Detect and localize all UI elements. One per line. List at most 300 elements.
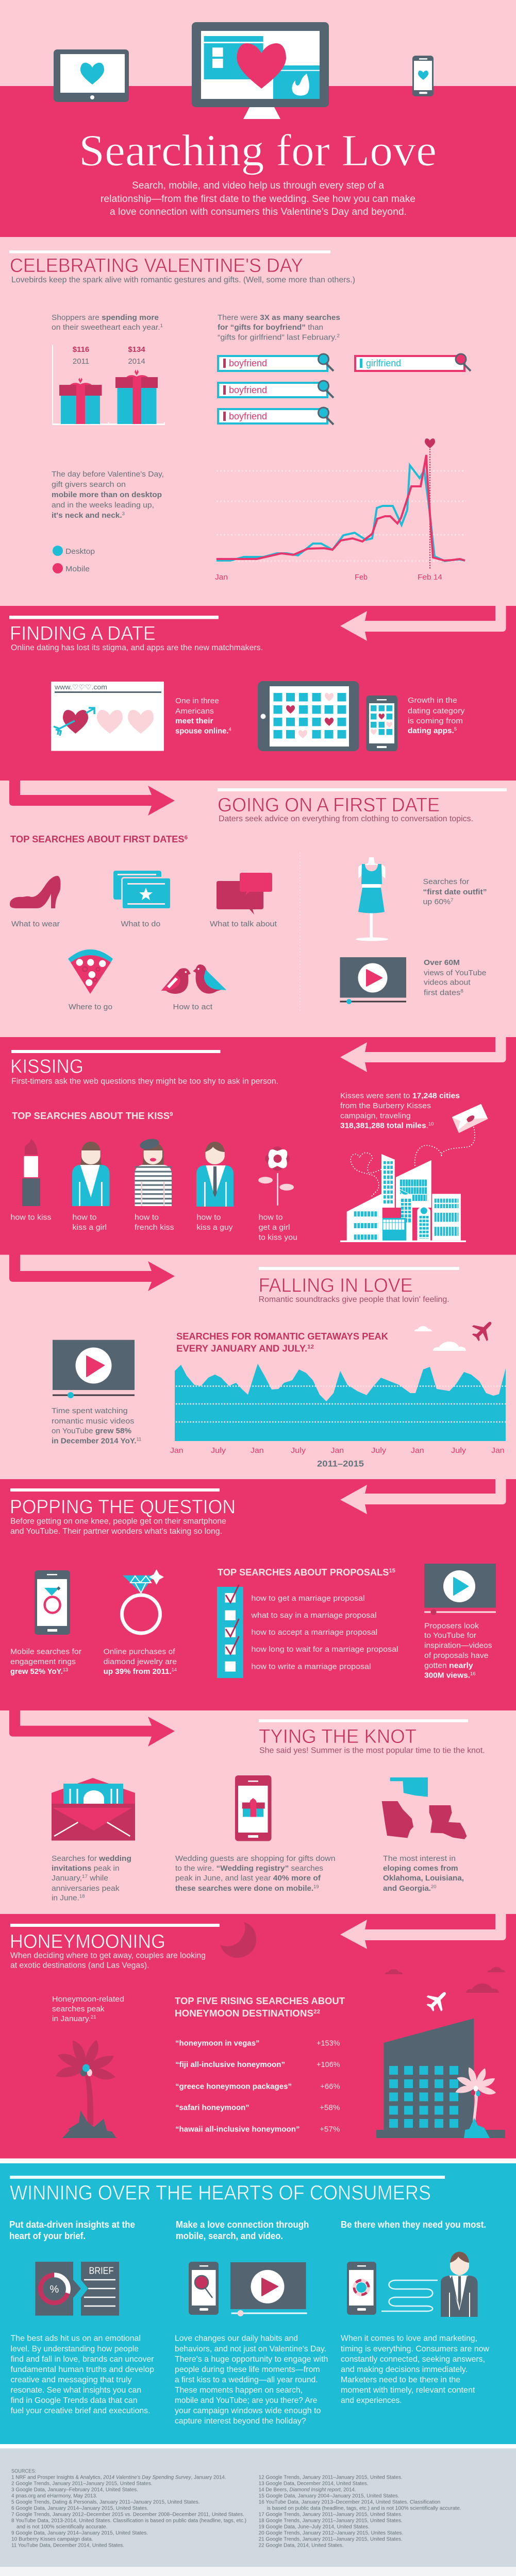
mobile vs desktop text: it's neck and neck. <box>52 511 122 520</box>
heading: TYING THE KNOT <box>259 1726 417 1748</box>
sources left column: 3 Google Data, January–February 2014, United States. <box>11 2486 138 2493</box>
label: What to talk about <box>210 920 277 928</box>
hero panel <box>0 22 516 237</box>
icon: phone <box>412 56 434 96</box>
spending text: Shoppers are spending more <box>52 313 159 322</box>
searches text <box>218 313 340 342</box>
text columns: creative and messaging that truly <box>10 2376 132 2384</box>
panel: sources: SOURCES: <box>11 2468 36 2474</box>
title: Searching for Love <box>79 125 437 175</box>
search boxes: girlfriend <box>366 358 401 368</box>
sources right column: 13 Google Data, December 2014, United States. <box>259 2480 368 2486</box>
column heads: Put data-driven insights at the <box>9 2219 135 2230</box>
legend <box>53 546 95 573</box>
panel: finding a date <box>0 606 516 781</box>
text columns: fuel your creative brief and executions. <box>10 2406 151 2415</box>
text: proposers: 300M views. <box>424 1671 470 1680</box>
text: proposers: to YouTube for <box>424 1631 476 1640</box>
text columns <box>10 2334 489 2426</box>
heading: CELEBRATING VALENTINE'S DAY <box>10 255 303 277</box>
icon: wedding invitation <box>52 1778 135 1840</box>
sources left column <box>11 2474 246 2548</box>
arrow <box>340 1914 506 1949</box>
text columns: These moments happen on search, <box>175 2386 303 2395</box>
icon: phone and marketer <box>347 2252 478 2317</box>
icon: phone and video <box>189 2262 307 2316</box>
panel: honeymooning <box>0 1914 516 2159</box>
icon: plane <box>468 1315 498 1345</box>
icon: flower <box>258 1146 294 1206</box>
search boxes: boyfriend <box>229 411 267 421</box>
arrow <box>9 781 175 816</box>
intro text <box>101 180 415 217</box>
icon: video player <box>424 1564 496 1615</box>
text: wedding registry: peak in June, and last year 40% more of <box>175 1874 321 1883</box>
sources right column: 21 Google Trends, January 2011–January 2015, United States. <box>259 2536 403 2542</box>
checklist: how to get a marriage proposal <box>252 1594 365 1603</box>
ranking list: +153% <box>317 2039 340 2047</box>
search boxes: boyfriend <box>229 358 267 368</box>
ranking list: +106% <box>317 2060 340 2069</box>
area chart: July <box>211 1446 226 1455</box>
panel: celebrating valentine's day <box>9 250 471 582</box>
sources right column: 16 YouTube Data, January 2013–December 2014, United States. Classification <box>259 2499 440 2505</box>
icon: diamond ring <box>122 1569 164 1633</box>
sources right column: 22 Google Data, 2014, United States. <box>259 2542 343 2548</box>
search boxes: boyfriend <box>229 385 267 395</box>
text columns: Marketers need to be there in the <box>341 2376 460 2384</box>
chart heading <box>176 1331 388 1354</box>
searches text: 2 <box>337 333 340 338</box>
text: wedding registry: to the wire. “Wedding registry” searches <box>175 1864 323 1873</box>
sources left column: 5 Google Trends, Dating & Personals, January 2011–January 2015, United States. <box>11 2499 200 2505</box>
arrow <box>9 1255 175 1291</box>
footer <box>0 2567 516 2576</box>
text: time spent: in December 2014 YoY. <box>52 1437 137 1446</box>
panel: tying the knot <box>9 1710 485 1903</box>
sources right column: 17 Google Trends, January 2011–January 2015, United States. <box>259 2511 403 2517</box>
sources right column: 20 Google Trends, January 2012–January 2015, Unites States. <box>259 2530 403 2536</box>
text: first date outfit: 7 <box>451 897 454 903</box>
sources right column: 14 De Beers, Diamond Insight report, 2014. <box>259 2486 356 2493</box>
ranking list: +58% <box>320 2104 340 2112</box>
text: diamond jewelry: up 39% from 2011. <box>104 1667 172 1676</box>
text columns: your campaign windows wide enough to <box>175 2406 321 2415</box>
icon: shoe <box>10 876 60 908</box>
mobile vs desktop text: The day before Valentine's Day, <box>52 470 164 479</box>
text columns: a first kiss to a wedding—all year round. <box>175 2376 318 2384</box>
text columns: capture interest beyond the holiday? <box>175 2417 306 2426</box>
text: one in three: 4 <box>229 726 231 732</box>
sources right column: 18 Google Trends, January 2011–January 2015, United States. <box>259 2517 403 2523</box>
column heads: mobile, search, and video. <box>176 2231 283 2241</box>
panel: popping the question <box>0 1479 516 1710</box>
area chart: Jan <box>170 1446 184 1455</box>
text: proposers <box>424 1622 492 1680</box>
line chart: Jan <box>215 573 228 582</box>
icon: brief <box>35 2262 119 2316</box>
text: one in three: Americans <box>175 707 214 716</box>
text: mobile searches: Mobile searches for <box>10 1648 81 1656</box>
text: mobile searches: 13 <box>63 1667 68 1672</box>
icon: state maps <box>382 1777 467 1839</box>
icon: envelope with kiss <box>452 1104 488 1133</box>
sources left column: 9 Google Data, January 2014–January 2015, United States. <box>11 2530 148 2536</box>
text: one in three: spouse online. <box>175 726 229 736</box>
labels: kiss searches <box>10 1213 297 1242</box>
top searches heading: 15 <box>389 1568 395 1574</box>
text: eloping: Oklahoma, Louisiana, <box>383 1874 464 1883</box>
browser illustration: www.♡♡♡.com <box>54 683 107 691</box>
subheading: Romantic soundtracks give people that lovin' feeling. <box>259 1295 450 1304</box>
ranking list: “honeymoon in vegas” <box>175 2039 260 2047</box>
text: mobile searches <box>10 1648 81 1676</box>
line chart: Feb <box>355 573 368 582</box>
text columns: find and fall in love, brands can uncover <box>10 2355 154 2364</box>
icon: moon <box>220 1922 256 1958</box>
icon: city skyline <box>340 1154 466 1242</box>
sources right column: 12 Google Trends, January 2011–January 2015, United States. <box>259 2474 403 2480</box>
label: What to wear <box>11 920 60 928</box>
heading: POPPING THE QUESTION <box>10 1496 236 1518</box>
intro text: Search, mobile, and video help us through every step of a <box>132 180 384 191</box>
text columns: Love changes our daily habits and <box>175 2334 298 2343</box>
labels: kiss searches: how to kiss <box>10 1213 52 1222</box>
text columns: resonate. See what insights you can <box>10 2386 141 2395</box>
text: diamond jewelry: 14 <box>172 1667 177 1672</box>
top five heading: TOP FIVE RISING SEARCHES ABOUT <box>175 1996 345 2006</box>
text: youtube views: views of YouTube <box>424 969 486 977</box>
area chart: 2011–2015 <box>317 1459 364 1468</box>
sources left column: 7 Google Trends, January 2012–December 2015 vs. December 2008–December 2011, United States. <box>11 2511 244 2517</box>
area chart: Jan <box>491 1446 505 1455</box>
text columns: There's a huge opportunity to engage with <box>175 2355 328 2364</box>
icon: tablet <box>54 49 129 102</box>
icon: girl <box>72 1142 109 1206</box>
text columns: and experiences. <box>341 2396 402 2405</box>
text: first date outfit: “first date outfit” <box>423 888 487 896</box>
labels: kiss searches: how to <box>259 1213 283 1222</box>
text: eloping: eloping comes from <box>383 1864 458 1873</box>
subheading: Daters seek advice on everything from clothing to conversation topics. <box>219 815 473 823</box>
text: growth: is coming from <box>408 717 463 725</box>
icon: speech bubbles <box>217 873 272 914</box>
text: time spent: Time spent watching <box>52 1406 128 1415</box>
icon: guy <box>196 1142 234 1207</box>
text: proposers: of proposals have <box>424 1651 489 1660</box>
text: honeymoon searches: searches peak <box>52 2005 105 2013</box>
arrow <box>9 1710 175 1747</box>
text: youtube views: first dates <box>424 988 457 997</box>
subheading: First-timers ask the web questions they might be too shy to ask in person. <box>11 1077 278 1086</box>
text: first date outfit: up 60% <box>423 897 449 906</box>
text: growth: dating apps. <box>408 726 454 735</box>
searches text: “gifts for girlfriend” last February. <box>218 333 329 342</box>
mobile vs desktop text: 3 <box>122 511 125 516</box>
top searches heading: 9 <box>170 1111 173 1117</box>
text: diamond jewelry: diamond jewelry are <box>104 1657 177 1666</box>
sources left column: and is not 100% scientifically accurate. <box>16 2523 107 2530</box>
gift bar chart: 2014 <box>128 357 145 366</box>
subheading <box>10 1952 206 1970</box>
area chart: July <box>371 1446 387 1455</box>
spending text <box>52 313 163 332</box>
subheading <box>10 1517 226 1536</box>
top searches heading: TOP SEARCHES ABOUT THE KISS <box>12 1111 165 1121</box>
ranking list: +66% <box>320 2082 340 2091</box>
gift bar chart: $116 <box>73 345 89 354</box>
sources left column: 10 Burberry Kisses campaign data. <box>11 2536 93 2542</box>
sources left column: 6 Google Data, January 2014–January 2015, United States. <box>11 2505 148 2511</box>
icon: brief: % <box>50 2284 59 2295</box>
text: growth: Growth in the <box>408 696 457 705</box>
clouds <box>414 1326 466 1351</box>
text: burberry kisses: Kisses were sent to 17,248 cities <box>340 1092 460 1100</box>
ranking list: +57% <box>320 2125 340 2134</box>
text: eloping <box>383 1854 464 1893</box>
mobile vs desktop text <box>52 470 164 520</box>
subheading: Before getting on one knee, people get on their smartphone <box>10 1517 226 1526</box>
top searches heading: TOP SEARCHES ABOUT FIRST DATES <box>10 834 181 844</box>
area chart: Jan <box>411 1446 424 1455</box>
gift bar chart: 2011 <box>73 357 89 366</box>
labels: kiss searches: how to <box>135 1213 159 1222</box>
icon: desktop monitor <box>192 22 329 119</box>
column heads: Make a love connection through <box>176 2219 309 2230</box>
text: growth <box>408 696 465 735</box>
text: proposers: Proposers look <box>424 1622 479 1630</box>
text: wedding invitations <box>52 1854 131 1903</box>
subheading: When deciding where to get away, couples are looking <box>10 1952 206 1960</box>
text: proposers: gotten nearly <box>424 1662 473 1670</box>
text: wedding registry: Wedding guests are shopping for gifts down <box>175 1854 336 1863</box>
checklist <box>217 1585 398 1678</box>
text columns: When it comes to love and marketing, <box>341 2334 477 2343</box>
top five heading <box>175 1996 345 2019</box>
heading: FINDING A DATE <box>10 623 156 645</box>
text: youtube views: 8 <box>460 988 463 993</box>
text: burberry kisses <box>340 1092 460 1130</box>
intro text: a love connection with consumers this Valentine's Day and beyond. <box>110 207 407 217</box>
text: honeymoon searches: in January. <box>52 2014 89 2023</box>
text: wedding invitations: January, <box>52 1874 80 1883</box>
icon: tablet with apps <box>258 681 359 751</box>
spending text: on their sweetheart each year. <box>52 323 155 332</box>
text columns: moment with timely, relevant content <box>341 2386 475 2395</box>
search boxes <box>218 354 471 425</box>
top searches heading: TOP SEARCHES ABOUT PROPOSALS <box>218 1567 387 1578</box>
legend: Desktop <box>65 547 95 556</box>
heading: WINNING OVER THE HEARTS OF CONSUMERS <box>10 2182 431 2205</box>
icon: phone with apps <box>366 696 397 751</box>
label: Where to go <box>69 1003 112 1011</box>
icon: dark palm tree <box>55 2039 116 2138</box>
checklist: how long to wait for a marriage proposal <box>252 1645 398 1654</box>
panel: going on a first date <box>9 781 507 1013</box>
panel: kissing <box>0 1037 516 1255</box>
text: one in three: One in three <box>175 697 219 705</box>
legend: Mobile <box>65 565 90 573</box>
arrow <box>340 1037 506 1072</box>
chart heading: EVERY JANUARY AND JULY. <box>176 1344 304 1354</box>
labels: kiss searches: how to <box>72 1213 97 1222</box>
sources right column: 19 Google Data, June–July 2014, United States. <box>259 2523 370 2530</box>
labels: kiss searches: how to <box>197 1213 221 1222</box>
label: How to act <box>173 1003 213 1011</box>
label: What to do <box>121 920 160 928</box>
text: eloping: 20 <box>431 1884 436 1889</box>
icon: lipstick <box>22 1139 40 1206</box>
subheading: Lovebirds keep the spark alive with romantic gestures and gifts. (Well, some more than others.) <box>11 276 355 284</box>
icon: video player <box>53 1340 135 1398</box>
text: one in three: meet their <box>175 717 213 725</box>
sources left column: 11 YouTube Data, December 2014, United States. <box>11 2542 124 2548</box>
sources right column: is based on public data (headline, tags, etc.) and is not 100% scientifically accurate. <box>267 2505 461 2511</box>
ranking list: “safari honeymoon” <box>175 2104 249 2112</box>
arrow <box>340 1479 506 1514</box>
text: burberry kisses: 318,381,288 total miles . <box>340 1121 428 1130</box>
icon: video player <box>340 957 406 1004</box>
chart heading: 12 <box>307 1344 314 1350</box>
area chart: July <box>291 1446 306 1455</box>
sources left column: 8 YouTube Data, 2013-2014, United States. Classification is based on public data (headline, tags, etc.) <box>11 2517 246 2523</box>
sources left column: 1 NRF and Prosper Insights & Analytics, 2014 Valentine's Day Spending Survey, January 2014. <box>11 2474 226 2480</box>
text columns: fundamental human truths and develop <box>10 2365 154 2374</box>
text columns: The best ads hit us on an emotional <box>10 2334 141 2343</box>
area chart: July <box>451 1446 467 1455</box>
text: growth: dating category <box>408 707 465 715</box>
text: mobile searches: grew 52% YoY. <box>10 1667 63 1676</box>
sources right column <box>259 2474 461 2548</box>
labels: kiss searches: kiss a girl <box>72 1223 107 1232</box>
spending text: 1 <box>160 323 163 328</box>
ranking list: “fiji all-inclusive honeymoon” <box>175 2060 285 2069</box>
sources left column: 2 Google Trends, January 2011–January 2015, United States. <box>11 2480 153 2486</box>
text: time spent: on YouTube grew 58% <box>52 1427 131 1435</box>
text: honeymoon searches <box>52 1995 124 2023</box>
text columns: and making decisions immediately. <box>341 2365 468 2374</box>
sources left column: 4 pnas.org and eHarmony, May 2013. <box>11 2493 97 2499</box>
icon: french girl <box>135 1137 172 1206</box>
sources right column: 15 Google Data, January 2004–January 2015, United States. <box>259 2493 399 2499</box>
text: first date outfit: Searches for <box>423 877 469 886</box>
checklist: how to write a marriage proposal <box>252 1662 371 1671</box>
subheading: at exotic destinations (and Las Vegas). <box>10 1961 149 1970</box>
icon: dress <box>356 857 388 941</box>
text: time spent: romantic music videos <box>52 1417 134 1426</box>
searches text: There were 3X as many searches <box>218 313 340 322</box>
panel: winning over the hearts of consumers <box>0 2159 516 2444</box>
text: wedding invitations: Searches for wedding <box>52 1854 131 1863</box>
panel: falling in love <box>9 1255 506 1468</box>
icon: phone with ring <box>35 1570 70 1635</box>
text: wedding invitations: in June. <box>52 1894 79 1903</box>
icon: brief: BRIEF <box>89 2266 113 2276</box>
mobile vs desktop text: gift givers search on <box>52 480 126 489</box>
text: proposers: inspiration—videos <box>424 1641 492 1650</box>
labels: kiss searches: french kiss <box>135 1223 174 1232</box>
text: wedding invitations: 17 <box>82 1874 88 1879</box>
dotted flight path <box>351 1127 475 1197</box>
gap <box>0 2444 516 2448</box>
text: time spent <box>52 1406 141 1446</box>
icon: hotel <box>376 2019 505 2138</box>
text: mobile searches: engagement rings <box>10 1657 76 1666</box>
browser illustration <box>51 682 164 751</box>
panel: sources <box>0 2448 516 2567</box>
text: burberry kisses: 10 <box>428 1121 434 1126</box>
ranking list: “hawaii all-inclusive honeymoon” <box>175 2125 300 2134</box>
heading: FALLING IN LOVE <box>259 1275 413 1296</box>
text: wedding invitations: while <box>88 1874 108 1883</box>
gift bar chart <box>52 345 165 425</box>
line chart <box>215 438 466 582</box>
text: diamond jewelry <box>104 1648 177 1676</box>
arrow <box>340 606 506 641</box>
searches text: for “gifts for boyfriend” than <box>218 323 323 332</box>
area chart: Jan <box>251 1446 264 1455</box>
intro text: relationship—from the first date to the wedding. See how you can make <box>101 194 415 205</box>
text: eloping: The most interest in <box>383 1854 456 1863</box>
text: wedding registry <box>175 1854 336 1893</box>
checklist: what to say in a marriage proposal <box>251 1611 376 1620</box>
mobile vs desktop text: and in the weeks leading up, <box>52 501 154 510</box>
clouds <box>385 1967 505 1993</box>
heading: GOING ON A FIRST DATE <box>218 794 440 816</box>
icon: love birds <box>161 964 226 994</box>
icon: phone with gift <box>235 1775 271 1841</box>
text: diamond jewelry: Online purchases of <box>104 1648 175 1656</box>
labels: kiss searches: get a girl <box>259 1223 290 1232</box>
text: youtube views: videos about <box>424 978 471 987</box>
text columns: find in Google Trends data that can <box>10 2396 137 2405</box>
heading: HONEYMOONING <box>10 1931 165 1953</box>
subheading: Online dating has lost its stigma, and apps are the new matchmakers. <box>11 643 263 652</box>
icon: plane <box>423 1985 453 2015</box>
text columns: mobile and YouTube; are you there? Are <box>175 2396 317 2405</box>
text columns: level. By understanding how people <box>10 2345 139 2353</box>
text: proposers: 16 <box>470 1671 476 1676</box>
text: growth: 5 <box>454 726 457 732</box>
text columns: timing is everything. Consumers are now <box>341 2345 489 2353</box>
subheading: She said yes! Summer is the most popular time to tie the knot. <box>259 1747 485 1755</box>
top searches heading: 6 <box>185 835 188 841</box>
text: youtube views: Over 60M <box>424 958 460 967</box>
labels: kiss searches: kiss a guy <box>197 1223 233 1232</box>
mobile vs desktop text: mobile more than on desktop <box>52 490 162 499</box>
area chart <box>170 1364 506 1468</box>
heading: KISSING <box>10 1056 84 1078</box>
column heads: heart of your brief. <box>9 2231 86 2241</box>
top five heading: 22 <box>313 2009 320 2015</box>
gift bar chart: $134 <box>128 345 145 354</box>
chart heading: SEARCHES FOR ROMANTIC GETAWAYS PEAK <box>176 1331 388 1342</box>
text: burberry kisses: campaign, traveling <box>340 1112 411 1121</box>
text: wedding registry: these searches were done on mobile. <box>175 1884 313 1893</box>
text: wedding invitations: 18 <box>79 1894 85 1899</box>
text: wedding invitations: anniversaries peak <box>52 1884 120 1893</box>
subheading: and YouTube. Their partner wonders what's taking so long. <box>10 1527 222 1536</box>
top five heading: HONEYMOON DESTINATIONS <box>175 2008 308 2019</box>
ranking list: “greece honeymoon packages” <box>175 2082 292 2091</box>
text columns: constantly connected, seeking answers, <box>341 2355 485 2364</box>
text: one in three <box>175 697 231 736</box>
text: honeymoon searches: Honeymoon-related <box>52 1995 124 2004</box>
text: first date outfit <box>423 877 487 906</box>
column heads <box>9 2219 486 2241</box>
text: wedding invitations: invitations peak in <box>52 1864 120 1873</box>
area chart: Jan <box>331 1446 344 1455</box>
